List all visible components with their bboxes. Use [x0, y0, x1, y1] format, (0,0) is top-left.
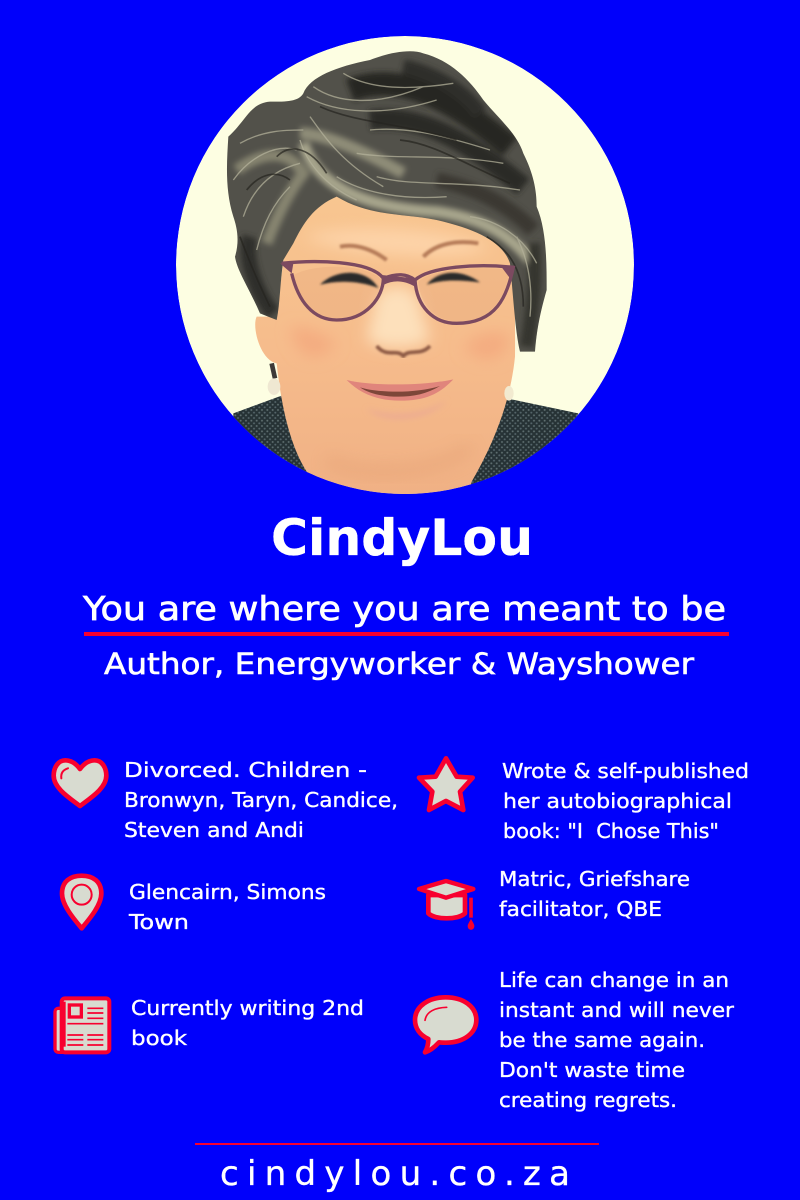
- text: life quote: Life can change in an: [499, 968, 729, 992]
- text: family: Divorced. Children -: [124, 758, 367, 782]
- footer website: cindylou.co.za: [220, 1154, 570, 1194]
- name heading: CindyLou: [271, 509, 533, 567]
- text: life quote: creating regrets.: [499, 1088, 677, 1112]
- text: education: facilitator, QBE: [499, 897, 662, 921]
- subtitle: Author, Energyworker & Wayshower: [104, 647, 694, 681]
- text: education: [499, 867, 690, 921]
- text: location: Town: [128, 910, 189, 934]
- tagline: You are where you are meant to be: [82, 589, 726, 628]
- icon: heart: [54, 760, 106, 806]
- portrait photo: [176, 36, 634, 503]
- text: life quote: instant and will never: [499, 998, 735, 1022]
- text: book: her autobiographical: [503, 789, 732, 813]
- text: life quote: be the same again.: [499, 1028, 705, 1052]
- tagline underline: [84, 632, 729, 636]
- text: current work: book: [131, 1026, 187, 1050]
- text: location: Glencairn, Simons: [129, 880, 326, 904]
- text: life quote: [499, 968, 735, 1112]
- text: current work: [131, 996, 364, 1050]
- icon: star: [419, 758, 473, 810]
- text: book: [502, 759, 749, 843]
- text: book: Wrote & self-published: [502, 759, 749, 783]
- icon: location pin: [62, 876, 101, 928]
- text: family: Steven and Andi: [124, 818, 304, 842]
- icon: newspaper: [55, 998, 109, 1052]
- text: book: book: "I Chose This": [503, 819, 719, 843]
- footer rule: [195, 1143, 599, 1145]
- icon: graduation cap: [419, 881, 474, 930]
- icon: speech bubble: [415, 997, 476, 1052]
- eyes and glasses: [294, 267, 382, 318]
- text: life quote: Don't waste time: [499, 1058, 685, 1082]
- text: family: [124, 758, 398, 842]
- text: family: Bronwyn, Taryn, Candice,: [124, 788, 398, 812]
- text: location: [128, 880, 326, 934]
- text: current work: Currently writing 2nd: [131, 996, 364, 1020]
- text: education: Matric, Griefshare: [499, 867, 690, 891]
